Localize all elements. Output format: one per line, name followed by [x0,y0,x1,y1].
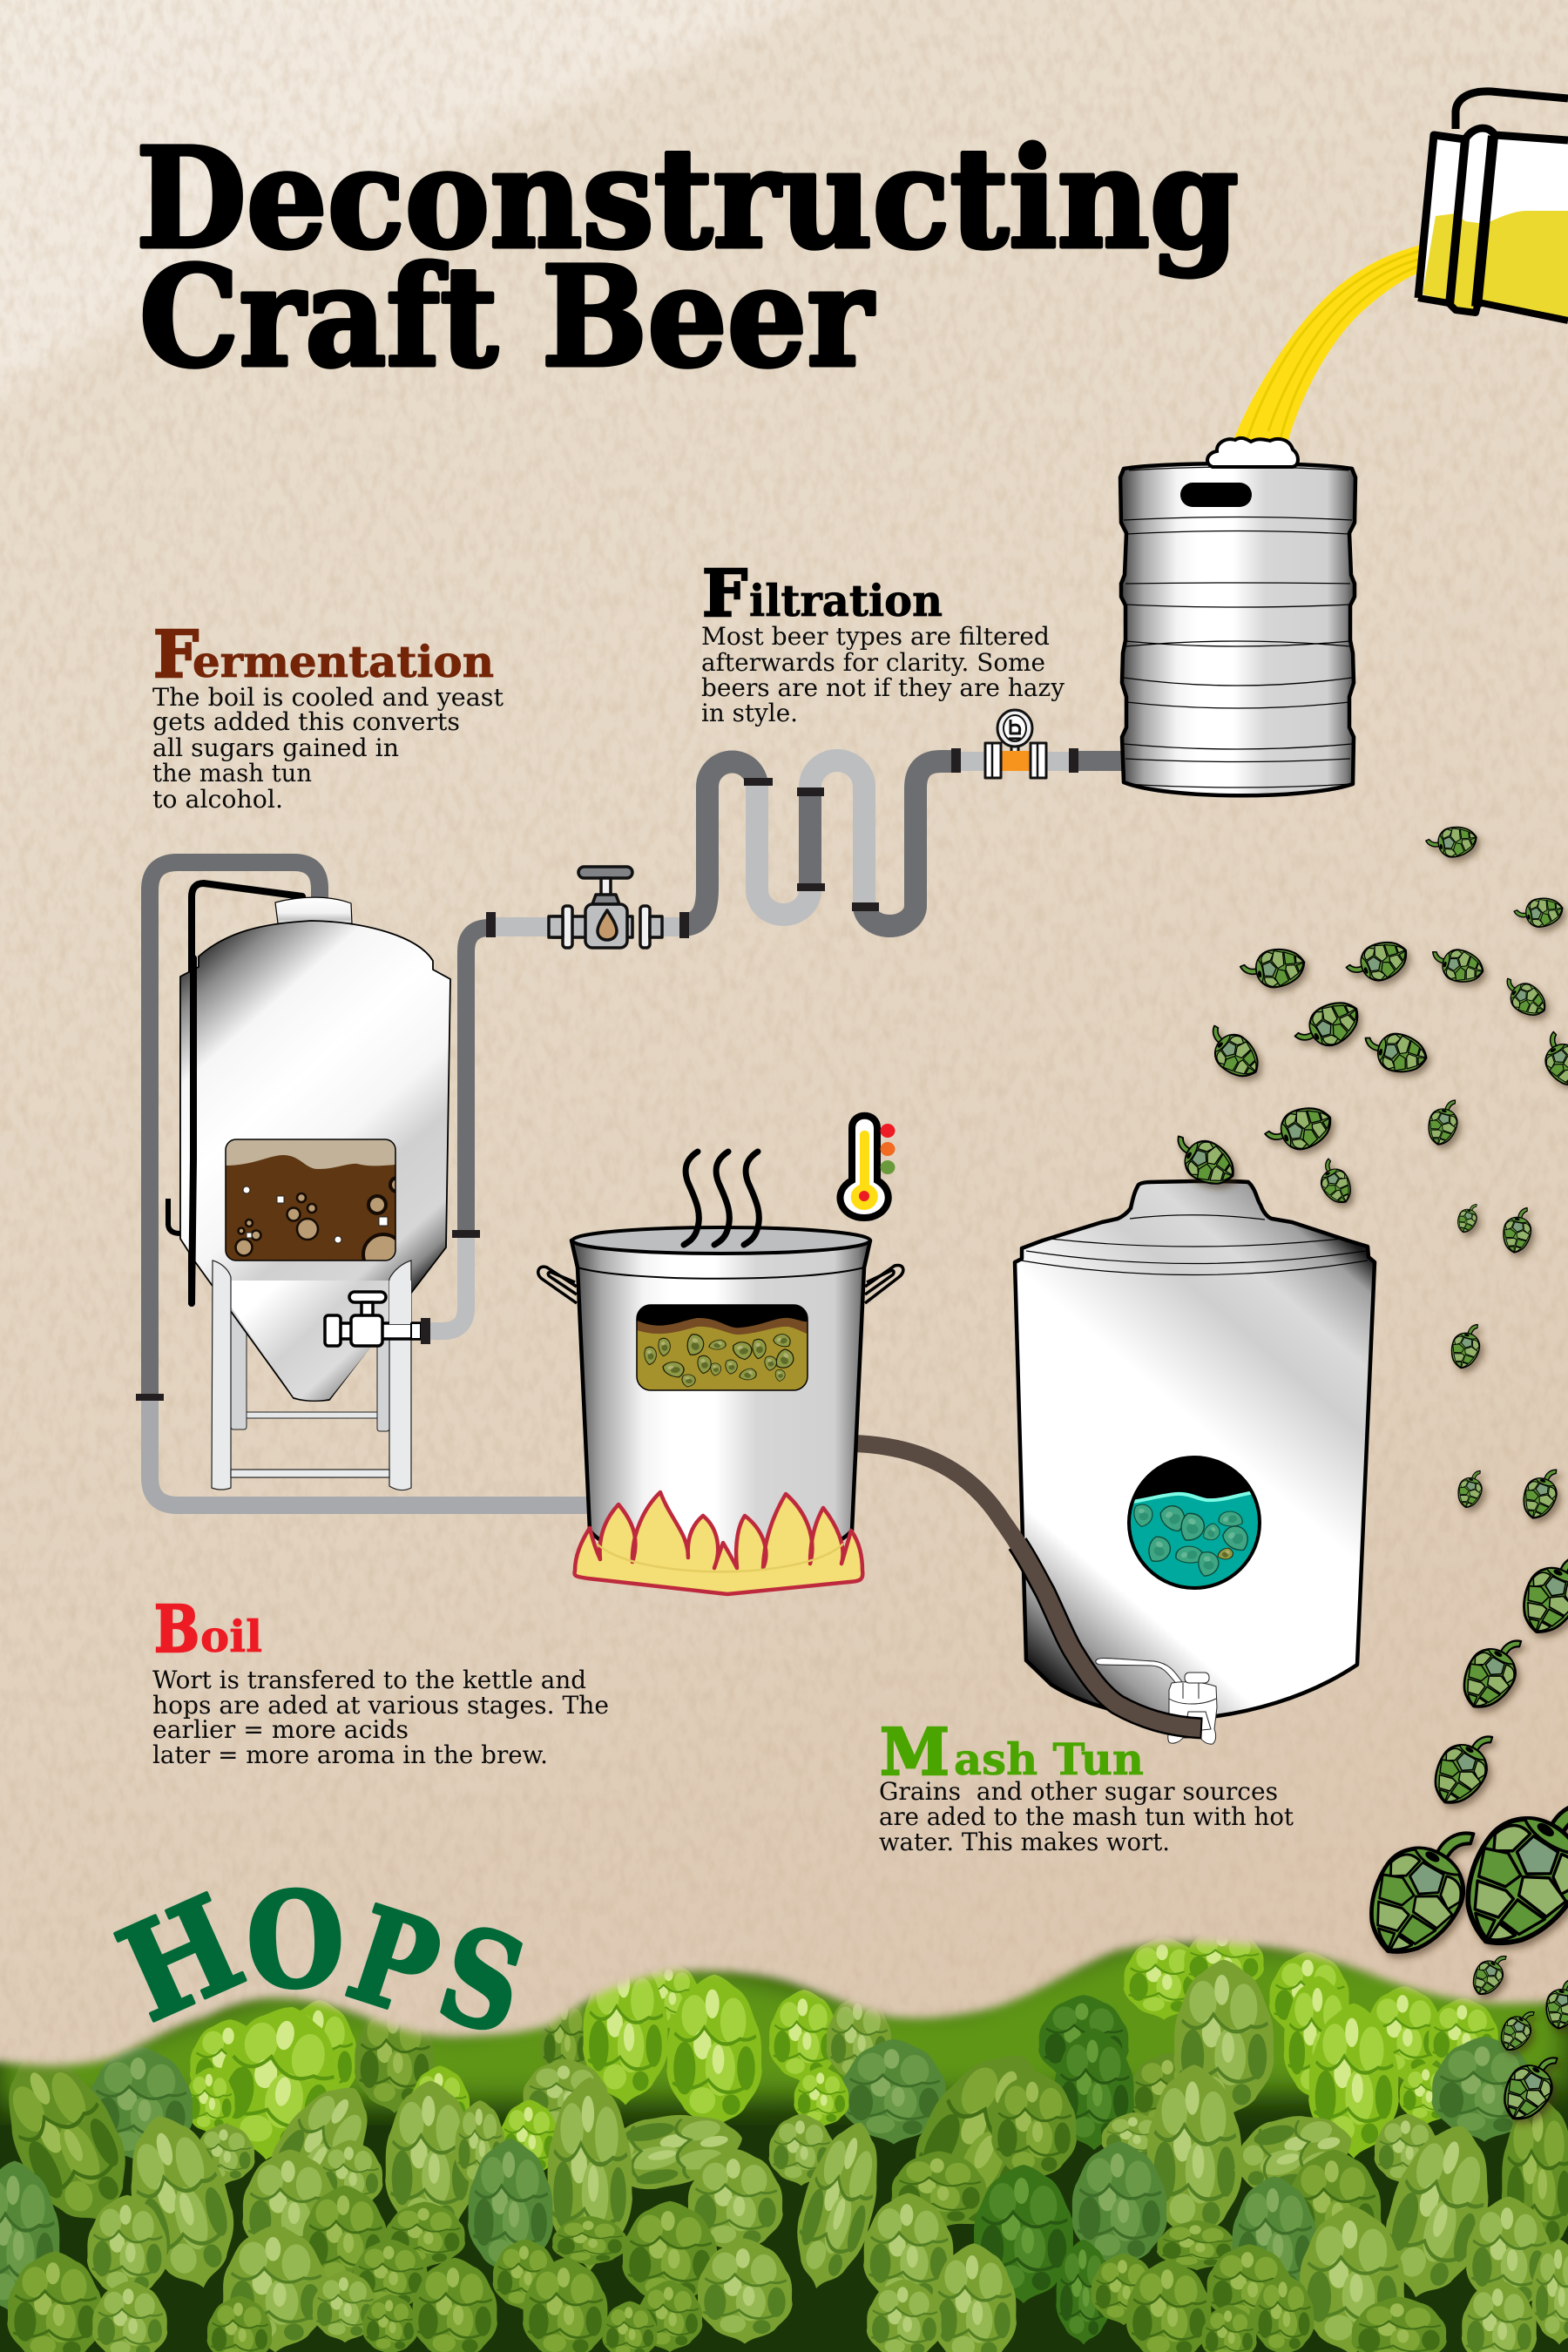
tube behind tank [192,883,302,1303]
foam [1207,438,1298,467]
mash tun [1015,1181,1375,1744]
beer keg [1120,463,1355,795]
tank body [180,921,450,1401]
icon: hop cone [1500,1205,1535,1254]
text: Boil [152,1666,609,1769]
icon: pressure gauge [985,710,1046,778]
icon: hop cone [1360,1027,1430,1077]
hops photo band [0,1928,1568,2352]
icon: hop cone [1455,1467,1487,1511]
kettle [538,1152,903,1594]
icon: hop cone [1289,993,1367,1060]
icon: hop cone [1517,1463,1565,1523]
heading: HOPS: O [244,1862,347,2018]
text: Filtration: beers are not if they are hazy [701,673,1064,702]
heading: Mash Tun: M [880,1715,950,1790]
icon: hop cone [1239,945,1308,993]
text: Fermentation: The boil is cooled and yeast [152,683,504,712]
icon: hop cone [1494,2003,1541,2056]
icon: hop cone [1424,823,1479,862]
pipe: gauge to keg [961,748,1124,773]
icon: hop cone [1424,1095,1463,1148]
icon: hop cone [1312,1155,1357,1208]
text: Fermentation: the mash tun [152,759,312,787]
heading: HOPS: P [332,1877,456,2048]
icon: hop cone [1543,1975,1568,2031]
heading: Mash Tun: ash Tun [954,1734,1144,1785]
text: Mash Tun: are aded to the mash tun with hot [879,1802,1294,1831]
fermenter tank [168,883,450,1490]
heading: Fermentation: ermentation [193,636,494,687]
heading: Filtration: F [702,557,747,632]
text: Filtration: Most beer types are filtered [701,622,1050,651]
title: Craft Beer [139,237,875,398]
icon: hop cone [1441,1765,1568,1968]
text: Fermentation: gets added this converts [152,707,460,736]
text: Fermentation [152,683,504,814]
heading: Filtration [702,557,943,632]
icon: tilted beer mug [1418,91,1568,322]
text: Fermentation: to alcohol. [152,785,283,814]
icon: hop cone [1427,943,1487,987]
heading: HOPS [98,1862,540,2065]
icon: hop cone [1197,1018,1267,1086]
text: Mash Tun [879,1777,1294,1856]
back legs [231,1307,389,1431]
icon: hop cone [1497,972,1552,1023]
icon: hop cone [1261,1100,1337,1159]
heading: Mash Tun [880,1715,1144,1790]
heading: HOPS: S [423,1896,540,2065]
beer stream [1233,244,1425,440]
text: Boil: earlier = more acids [152,1715,409,1744]
heading: Boil: B [154,1592,199,1667]
pipe: filtration serpentine [679,748,961,938]
pipe: fermenter riser [427,912,683,1331]
front legs [212,1260,411,1490]
icon: hop cone [1512,895,1565,931]
tank cap [275,897,352,923]
heading: Boil [154,1592,262,1667]
icon: pipe valve [549,867,662,948]
icon: hop cone [1447,1320,1485,1371]
text: Mash Tun: water. This makes wort. [879,1828,1170,1856]
text: Boil: Wort is transfered to the kettle and [152,1666,586,1694]
text: Boil: hops are aded at various stages. The [152,1691,609,1720]
icon: hop cone [1342,935,1413,991]
text: Filtration: in style. [701,699,798,727]
mash tun window [1131,1459,1258,1586]
text: Boil: later = more aroma in the brew. [152,1740,548,1769]
icon: hop cone [1494,2043,1568,2129]
kettle body [571,1240,870,1565]
icon: hop cone [1454,1200,1482,1235]
kettle window [637,1305,808,1390]
title: Deconstructing [136,118,1239,280]
mash tun tap [1096,1658,1217,1744]
icon: hop cone [1533,1027,1568,1092]
icon: hop cone [1350,1804,1495,1971]
fermenter window [226,1139,395,1260]
pipe: fermenter to kettle [136,862,601,1505]
tank drain valve [325,1281,430,1346]
hose: kettle to mash tun [854,1443,1202,1728]
text: Filtration: afterwards for clarity. Some [701,648,1045,677]
text: Mash Tun: Grains and other sugar sources [879,1777,1278,1806]
icon: hop cone [1466,1947,1513,2000]
steam [684,1152,759,1245]
title [136,118,1239,398]
icon: hop cone [1512,1541,1568,1642]
kettle handles [538,1265,903,1303]
icon: hop cone [1452,1625,1533,1718]
icon: hop cone [1165,1126,1242,1193]
flames [575,1492,862,1594]
icon: hop cone [1423,1720,1504,1814]
heading: Filtration: iltration [749,575,943,626]
text: Filtration [701,622,1064,727]
heading: Fermentation [153,618,494,693]
icon: thermometer [840,1116,896,1218]
text: Fermentation: all sugars gained in [152,733,399,762]
falling hop cones [1165,823,1568,2129]
heading: Boil: oil [200,1611,262,1662]
heading: HOPS: H [98,1866,263,2051]
heading: Fermentation: F [153,618,199,693]
